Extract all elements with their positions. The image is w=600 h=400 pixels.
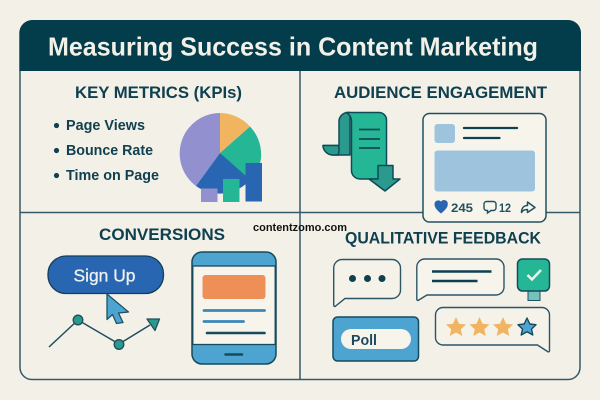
bullet list: Page Views xyxy=(66,118,145,134)
poll box xyxy=(333,317,418,361)
icon: share xyxy=(522,202,535,212)
icon: cursor xyxy=(107,294,128,324)
panel: key metrics xyxy=(54,84,262,202)
bullet list: Time on Page xyxy=(66,168,159,184)
social post card xyxy=(423,114,546,222)
title: Measuring Success in Content Marketing xyxy=(48,32,538,62)
icon: check badge xyxy=(518,259,550,300)
speech bubble: text lines xyxy=(417,259,504,300)
bullet list xyxy=(54,118,159,184)
icon: mobile landing page xyxy=(192,252,276,364)
heading: audience engagement: AUDIENCE ENGAGEMENT xyxy=(334,84,547,102)
sign up button xyxy=(48,256,164,294)
heading: qualitative feedback: QUALITATIVE FEEDBACK xyxy=(345,230,541,248)
star rating bubble xyxy=(436,308,550,352)
panel: qualitative feedback xyxy=(333,230,550,361)
icon: scroll with down arrow xyxy=(323,112,400,191)
title banner xyxy=(20,20,581,71)
poll box: Poll xyxy=(351,332,377,349)
chart: pie with bars xyxy=(180,113,262,202)
trend line chart xyxy=(49,315,160,349)
panel: audience engagement xyxy=(323,84,547,222)
heading: key metrics: KEY METRICS (KPIs) xyxy=(75,84,242,102)
watermark: contentzomo.com xyxy=(253,222,347,234)
icon: heart xyxy=(434,200,448,214)
bullet list: Bounce Rate xyxy=(66,143,153,159)
panel: conversions xyxy=(48,226,276,364)
comment count: 12 xyxy=(499,201,511,215)
speech bubble: dots xyxy=(334,260,400,306)
heading: conversions: CONVERSIONS xyxy=(99,226,225,244)
icon: comment xyxy=(484,202,496,213)
like count: 245 xyxy=(451,201,473,215)
sign up button: Sign Up xyxy=(74,266,136,286)
